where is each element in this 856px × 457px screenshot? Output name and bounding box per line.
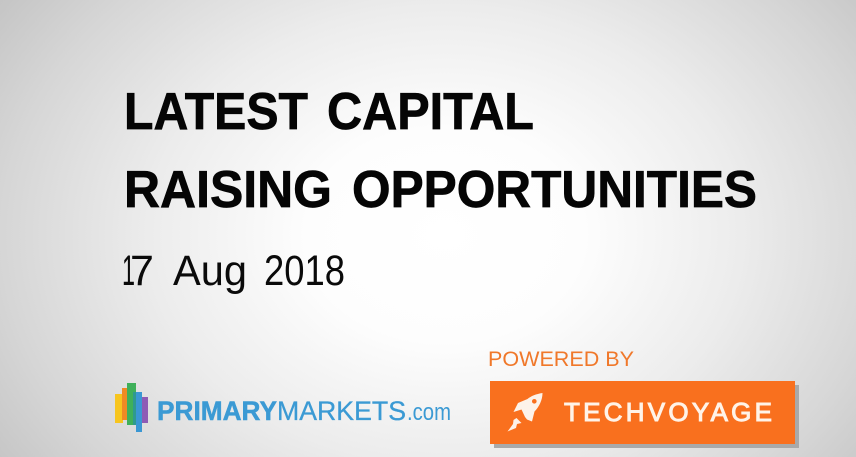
title [124,83,757,219]
powered by label: POWERED BY [488,348,634,371]
badge text: TECHVOYAGE [564,397,772,427]
logo wordmark [157,396,451,426]
logo: PrimaryMarkets [115,383,451,432]
date: 7 [130,247,154,295]
title: LATEST [124,83,308,141]
date: 1 [122,247,135,295]
date: 2018 [264,247,345,295]
logo wordmark: PRIMARY [157,396,277,426]
title: OPPORTUNITIES [352,161,757,219]
icon: rocket [508,393,542,432]
icon: coloured bars [115,383,148,432]
date [122,247,345,295]
logo wordmark: .com [407,399,451,426]
badge: TechVoyage [490,381,799,448]
title: RAISING [124,161,332,219]
logo wordmark: MARKETS [277,396,406,426]
date: Aug [173,247,247,295]
title: CAPITAL [327,83,534,141]
